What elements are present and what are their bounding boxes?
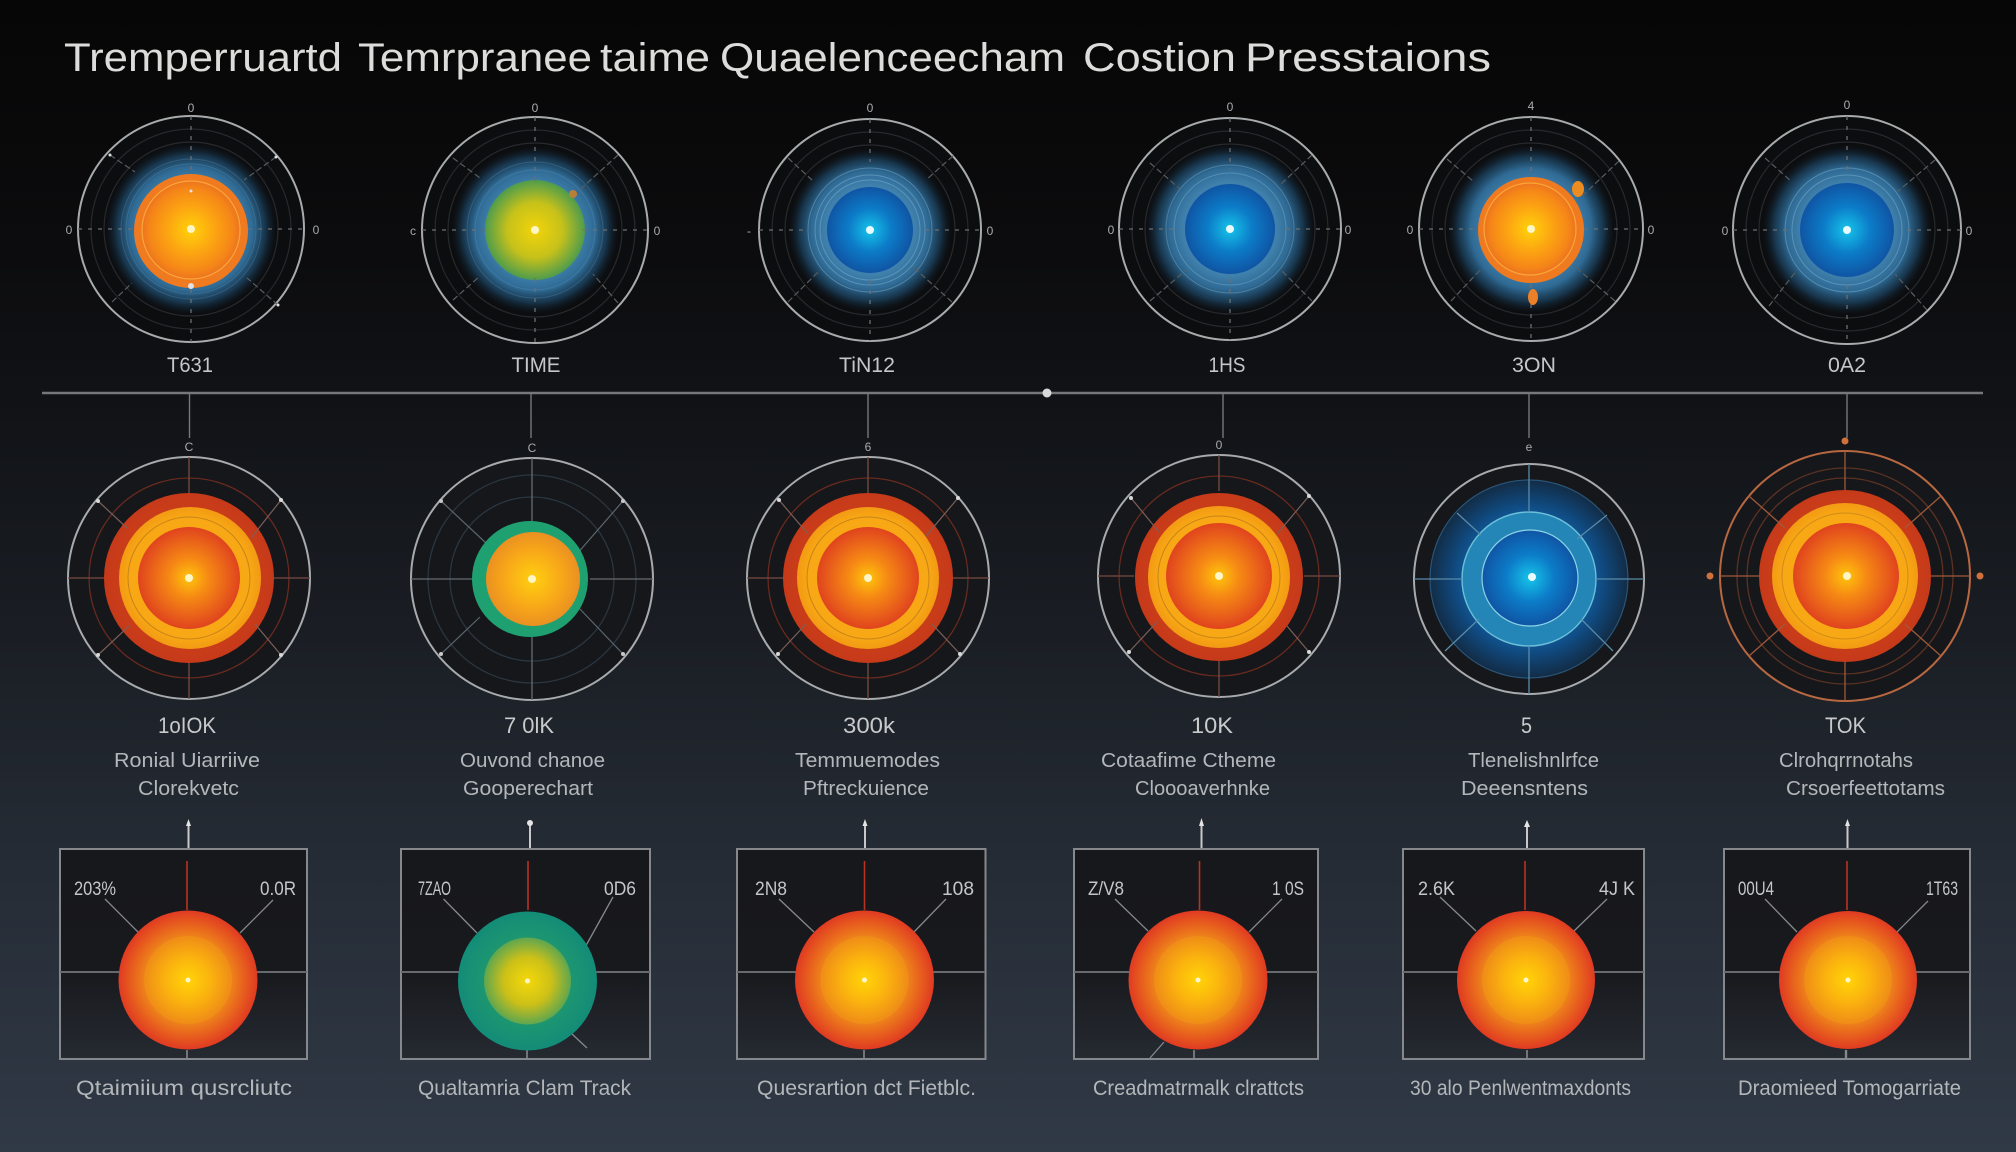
bottom row captions: 30 alo Penlwentmaxdonts — [1410, 1077, 1631, 1100]
panel: bottom chart 1: 0.0R — [260, 879, 296, 900]
panel: top dial 4 blue — [1108, 100, 1352, 340]
top row time labels: 1HS — [1208, 354, 1246, 377]
panel: top dial 6 blue: 0 — [1966, 224, 1973, 238]
panel: bottom chart 2 — [401, 820, 650, 1059]
middle row descriptions: Crsoerfeettotams — [1786, 778, 1945, 800]
panel: top dial 5 orange: 4 — [1528, 99, 1535, 113]
panel: top dial 5 orange — [1407, 99, 1655, 341]
panel: top dial 6 blue: 0 — [1844, 98, 1851, 112]
panel: middle dial 5 blue: e — [1526, 440, 1533, 454]
title: taime — [600, 36, 710, 80]
middle row descriptions: Tlenelishnlrfce — [1468, 750, 1599, 772]
middle row descriptions: Clorekvetc — [138, 778, 239, 800]
panel: top dial 2 green: c — [410, 224, 416, 238]
title: Presstaions — [1245, 36, 1491, 80]
panel: bottom chart 4: Z/V8 — [1088, 879, 1124, 900]
panel: bottom chart 1: 203% — [74, 879, 116, 900]
panel: top dial 1 orange: 0 — [188, 101, 195, 115]
panel: middle dial 5 blue — [1414, 440, 1644, 694]
middle row descriptions: Clrohqrrnotahs — [1779, 750, 1913, 772]
middle row descriptions: Ronial Uiarriive — [114, 750, 260, 772]
panel: bottom chart 5: 4J K — [1599, 879, 1635, 900]
panel: bottom chart 2: 0D6 — [604, 879, 636, 900]
panel: top dial 3 blue: - — [747, 224, 751, 238]
middle row descriptions — [114, 750, 1945, 800]
middle row descriptions: Ouvond chanoe — [460, 750, 605, 772]
panel: top dial 3 blue — [747, 101, 994, 341]
top row time labels: T631 — [167, 354, 213, 377]
panel: middle dial 1 red: C — [185, 440, 194, 454]
middle row descriptions: Gooperechart — [463, 778, 593, 800]
middle row descriptions: Pftreckuience — [803, 778, 929, 800]
panel: bottom chart 2: 7ZAO — [418, 879, 451, 900]
middle row temperature labels: 1oIOK — [158, 713, 216, 738]
bottom row captions: Creadmatrmalk clrattcts — [1093, 1077, 1304, 1100]
middle row temperature labels — [158, 713, 1866, 738]
panel: bottom chart 6: 00U4 — [1738, 879, 1774, 900]
bottom row captions: Draomieed Tomogarriate — [1738, 1077, 1961, 1100]
panel: bottom chart 5 — [1403, 820, 1644, 1059]
title: Costion — [1083, 36, 1236, 80]
top row time labels: TiN12 — [839, 354, 895, 377]
title: Tremperruartd — [64, 36, 342, 80]
panel: top dial 4 blue: 0 — [1108, 223, 1115, 237]
top row time labels: TIME — [512, 354, 560, 377]
panel: bottom chart 4 — [1074, 818, 1318, 1059]
middle row temperature labels: 10K — [1191, 713, 1233, 738]
title: Quaelenceecham — [720, 36, 1065, 80]
top row time labels: 3ON — [1512, 354, 1556, 377]
panel: bottom chart 6 — [1724, 819, 1970, 1059]
panel: top dial 1 orange: 0 — [66, 223, 73, 237]
panel: top dial 4 blue: 0 — [1345, 223, 1352, 237]
bottom row captions: Quesrartion dct Fietblc. — [757, 1077, 976, 1100]
panel: top dial 3 blue: 0 — [987, 224, 994, 238]
middle row temperature labels: TOK — [1825, 713, 1866, 738]
middle row descriptions: Cotaafime Ctheme — [1101, 750, 1276, 772]
panel: middle dial 4 red — [1098, 438, 1340, 697]
panel: middle dial 2 green — [411, 441, 653, 700]
title — [64, 36, 1491, 80]
top row time labels: 0A2 — [1828, 354, 1866, 377]
panel: top dial 2 green: 0 — [654, 224, 661, 238]
timeline with connectors — [42, 388, 1983, 438]
panel: bottom chart 1 — [60, 819, 307, 1059]
panel: middle dial 6 orange — [1706, 438, 1984, 701]
top row time labels — [167, 354, 1866, 377]
panel: bottom chart 4: 1 0S — [1272, 879, 1304, 900]
middle row temperature labels: 300k — [843, 713, 896, 738]
panel: bottom chart 3 — [737, 819, 986, 1059]
panel: bottom chart 5: 2.6K — [1418, 879, 1455, 900]
panel: top dial 5 orange: 0 — [1648, 223, 1655, 237]
panel: bottom chart 6: 1T63 — [1926, 879, 1958, 900]
middle row descriptions: Deeensntens — [1461, 778, 1588, 800]
panel: top dial 3 blue: 0 — [867, 101, 874, 115]
title: Temrpranee — [358, 36, 592, 80]
panel: top dial 1 orange — [66, 101, 320, 342]
panel: bottom chart 3: 108 — [942, 879, 974, 900]
panel: top dial 2 green — [410, 101, 661, 343]
middle row descriptions: Cloooaverhnke — [1135, 778, 1270, 800]
bottom row captions — [76, 1077, 1961, 1100]
bottom row captions: Qtaimiium qusrcliutc — [76, 1077, 292, 1100]
panel: middle dial 2 green: C — [528, 441, 537, 455]
panel: top dial 5 orange: 0 — [1407, 223, 1414, 237]
panel: bottom chart 3: 2N8 — [755, 879, 787, 900]
middle row temperature labels: 7 0lK — [504, 713, 554, 738]
panel: top dial 2 green: 0 — [532, 101, 539, 115]
panel: middle dial 4 red: 0 — [1216, 438, 1223, 452]
middle row descriptions: Temmuemodes — [795, 750, 940, 772]
panel: top dial 4 blue: 0 — [1227, 100, 1234, 114]
bottom row captions: Qualtamria Clam Track — [418, 1077, 631, 1100]
middle row temperature labels: 5 — [1521, 713, 1532, 738]
panel: top dial 6 blue: 0 — [1722, 224, 1729, 238]
panel: top dial 1 orange: 0 — [313, 223, 320, 237]
panel: middle dial 3 red — [747, 440, 989, 699]
panel: middle dial 3 red: 6 — [865, 440, 872, 454]
panel: middle dial 1 red — [68, 440, 310, 699]
panel: top dial 6 blue — [1722, 98, 1973, 344]
